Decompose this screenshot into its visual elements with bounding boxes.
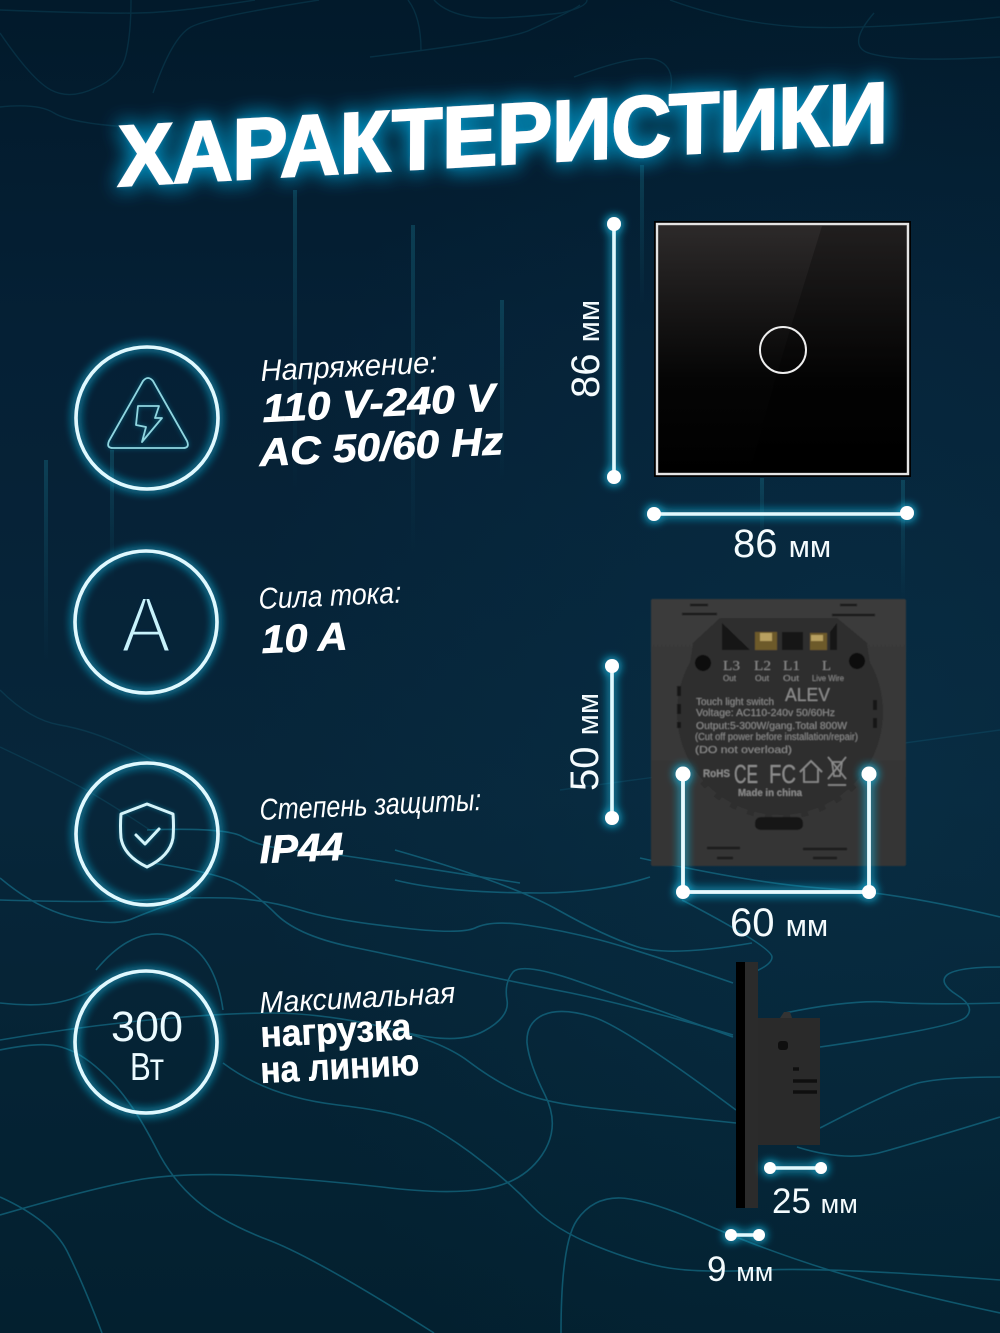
terminal labels: Out xyxy=(755,673,770,683)
icon: 300 W in circle xyxy=(75,971,217,1113)
certification marks: FC xyxy=(769,759,796,789)
dimension: panel thickness xyxy=(707,1229,773,1289)
printed specs: Output:5-300W/gang.Total 800W xyxy=(696,720,847,732)
dimension: body width bracket xyxy=(676,766,876,945)
dimension: body width bracket: 60 мм xyxy=(730,901,828,945)
terminal labels: Out xyxy=(783,673,800,683)
load value: на линию xyxy=(259,1042,420,1091)
icon: ampere in circle: A xyxy=(121,580,171,669)
icon: voltage triangle in circle xyxy=(76,347,218,489)
load label: Максимальная xyxy=(259,977,456,1020)
side view of switch xyxy=(736,962,820,1208)
dimension: body height: 50 мм xyxy=(563,693,607,791)
protection value: IP44 xyxy=(259,826,345,872)
dimension: panel thickness: 9 мм xyxy=(707,1250,773,1289)
dimension: panel height xyxy=(564,217,621,484)
voltage value xyxy=(257,376,505,475)
printed specs: (DO not overload) xyxy=(695,744,792,756)
spec: max load xyxy=(75,971,456,1113)
icon: ampere in circle xyxy=(75,551,217,693)
icon: 300 W in circle: 300 xyxy=(111,1003,183,1051)
terminal labels: L2 xyxy=(754,659,771,674)
dimension: panel height: 86 мм xyxy=(564,300,608,398)
dimension: panel width: 86 мм xyxy=(733,522,831,566)
printed specs: (Cut off power before installation/repair) xyxy=(695,732,858,743)
certification marks: Made in china xyxy=(738,788,802,799)
printed specs xyxy=(695,696,858,756)
certification marks: CE xyxy=(734,759,758,789)
back of switch xyxy=(651,599,906,866)
title: ХАРАКТЕРИСТИКИ xyxy=(118,65,888,205)
spec: current xyxy=(75,551,402,693)
front panel of switch xyxy=(654,221,911,477)
load value: нагрузка xyxy=(259,1006,413,1055)
icon: 300 W in circle: Вт xyxy=(130,1046,164,1089)
terminal labels: L3 xyxy=(723,659,740,674)
voltage label: Напряжение: xyxy=(260,346,438,388)
icon: shield in circle xyxy=(76,763,218,905)
spec: voltage xyxy=(76,346,505,489)
terminal labels: Out xyxy=(723,673,737,683)
voltage value: 110 V-240 V xyxy=(261,376,499,431)
touch button ring xyxy=(760,327,806,373)
terminal labels xyxy=(723,659,844,683)
dimension: body height xyxy=(563,659,619,825)
dimension: panel width xyxy=(647,506,914,566)
terminal labels: L xyxy=(822,659,831,674)
dimension: body depth: 25 мм xyxy=(772,1182,858,1221)
load value xyxy=(259,1006,420,1091)
terminal labels: L1 xyxy=(783,659,800,674)
printed specs: Voltage: AC110-240v 50/60Hz xyxy=(696,707,835,719)
protection label: Степень защиты: xyxy=(259,784,482,827)
dimension: body depth xyxy=(764,1162,858,1221)
current value: 10 A xyxy=(261,615,348,662)
current label: Сила тока: xyxy=(258,577,402,616)
certification marks xyxy=(703,757,846,799)
certification marks: RoHS xyxy=(703,768,730,780)
terminal labels: Live Wire xyxy=(812,673,844,683)
voltage value: AC 50/60 Hz xyxy=(257,420,505,475)
printed specs: Touch light switch xyxy=(696,696,774,708)
spec: protection xyxy=(76,763,482,905)
brand: ALEV xyxy=(785,685,830,705)
